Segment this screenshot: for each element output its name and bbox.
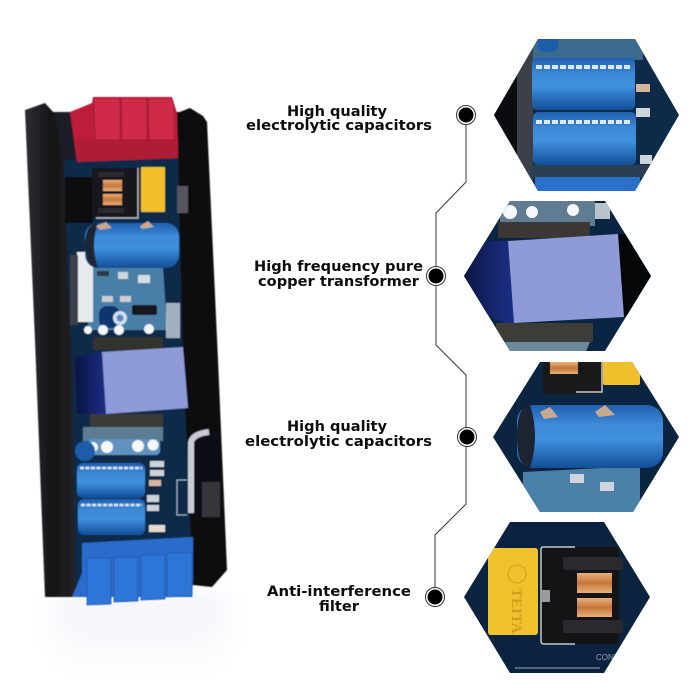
outline footprint [177, 480, 187, 515]
hexagon: single capacitor close-up [490, 360, 682, 515]
label: capacitors middle: electrolytic capacitors [245, 434, 432, 450]
hexagon: filter close-up [460, 520, 655, 676]
transformer pins bottom [90, 414, 163, 427]
SMD column lower [147, 461, 165, 532]
red input connector [70, 97, 178, 162]
marker 2 [426, 266, 446, 286]
metal pin and block [191, 432, 220, 517]
hexagon: twin capacitors close-up [490, 35, 685, 195]
SMD resistor column [166, 303, 180, 338]
capacitor lower [78, 499, 145, 535]
PCB board [64, 155, 195, 590]
large blue capacitor [85, 221, 179, 268]
diode [132, 305, 157, 315]
solder holes top [84, 324, 154, 335]
board light patch [88, 266, 167, 330]
label: filter [267, 584, 411, 615]
capacitor upper [77, 463, 145, 498]
black recess beside filter [65, 177, 93, 223]
marker 4 [426, 588, 444, 606]
frame backing [50, 112, 195, 592]
blue transformer left face [75, 352, 106, 414]
grey board band [83, 427, 163, 441]
label: transformer: High frequency pure [254, 259, 423, 275]
floor reflection [55, 595, 225, 675]
right black rail [177, 108, 227, 587]
grey chip [177, 186, 188, 213]
common-mode filter choke [92, 168, 140, 218]
connector line path [435, 115, 466, 597]
white metal strip [77, 252, 93, 322]
small round capacitor [99, 306, 127, 328]
label: transformer [254, 259, 423, 290]
yellow X capacitor [141, 167, 165, 212]
label: capacitors middle: High quality [287, 419, 388, 435]
marker 1 [456, 106, 476, 124]
hexagon: filter close-up: CONN [596, 653, 620, 662]
label: capacitors top: High quality [287, 104, 388, 120]
marker 3 [458, 428, 476, 446]
label: transformer: copper transformer [258, 274, 420, 290]
device: power module photo [25, 97, 227, 605]
hexagon: transformer close-up [460, 198, 655, 354]
hexagon: filter close-up: TEITA [508, 588, 524, 634]
label: capacitors top: electrolytic capacitors [246, 118, 432, 134]
left black rail [25, 103, 80, 597]
blue transformer top face [102, 347, 188, 414]
blue output connector [72, 537, 193, 605]
small SMD parts [97, 271, 150, 302]
label: capacitors top [246, 104, 432, 134]
solder holes bottom [88, 440, 158, 453]
small blue cap [75, 441, 95, 461]
label: filter: Anti-interference [267, 584, 411, 600]
label: capacitors middle [245, 419, 432, 450]
transformer pins top [93, 337, 163, 350]
label: filter: filter [319, 599, 360, 615]
filter body [541, 547, 623, 644]
